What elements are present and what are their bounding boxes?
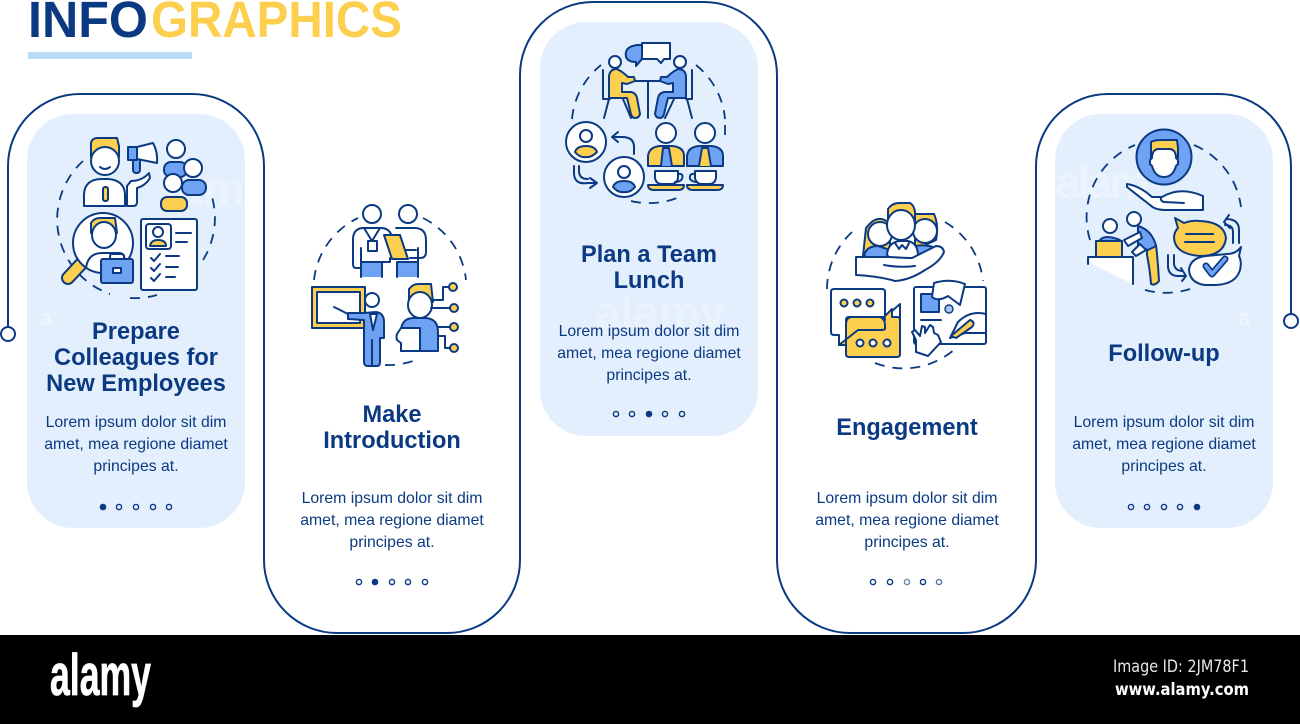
- text block: amet, mea regione diamet: [1072, 436, 1256, 453]
- heading: New Employees: [46, 371, 226, 397]
- text block: Lorem ipsum dolor sit dim: [559, 323, 739, 340]
- panel: prepare colleagues: [27, 114, 245, 528]
- heading: [581, 242, 717, 294]
- panel: team lunch: [540, 22, 758, 436]
- heading: Lunch: [614, 268, 684, 294]
- pagination dots: [100, 504, 172, 510]
- text block: principes at.: [606, 367, 692, 384]
- icon: colleagues and new employee: [57, 138, 215, 298]
- text block: principes at.: [349, 534, 435, 551]
- image id: Image ID: 2JM78F1: [1113, 657, 1249, 676]
- text block: Lorem ipsum dolor sit dim: [817, 490, 997, 507]
- text block: principes at.: [864, 534, 950, 551]
- pagination dots: [356, 579, 428, 585]
- icon: team lunch: [566, 43, 725, 203]
- heading: Introduction: [323, 428, 461, 454]
- text block: amet, mea regione diamet: [557, 345, 741, 362]
- text block: Lorem ipsum dolor sit dim: [302, 490, 482, 507]
- text block: principes at.: [93, 458, 179, 475]
- panel: follow-up: a: [1238, 305, 1251, 330]
- text block: principes at.: [1121, 458, 1207, 475]
- text block: [557, 323, 741, 384]
- site url: www.alamy.com: [1115, 680, 1249, 700]
- footer bar: [0, 635, 1300, 724]
- panel: prepare colleagues: lam: [165, 163, 244, 215]
- panel: prepare colleagues: a: [40, 305, 53, 330]
- text block: Lorem ipsum dolor sit dim: [1074, 414, 1254, 431]
- panel: engagement: [815, 203, 999, 585]
- text block: amet, mea regione diamet: [815, 512, 999, 529]
- icon: follow-up: [1087, 130, 1241, 293]
- heading: Colleagues for: [54, 345, 218, 371]
- title: [28, 0, 402, 59]
- text block: [300, 490, 484, 551]
- panel: follow-up: [1055, 114, 1273, 528]
- text block: [815, 490, 999, 551]
- text block: amet, mea regione diamet: [300, 512, 484, 529]
- icon: introductions: [311, 205, 466, 366]
- heading: [323, 402, 461, 454]
- text block: [1072, 414, 1256, 475]
- heading: Engagement: [836, 415, 978, 441]
- pagination dots: [870, 579, 942, 585]
- logo: alamy: [50, 643, 151, 708]
- icon: engagement: [827, 203, 986, 368]
- text block: [44, 414, 228, 475]
- heading: Plan a Team: [581, 242, 717, 268]
- pagination dots: [613, 411, 685, 417]
- text block: amet, mea regione diamet: [44, 436, 228, 453]
- text block: Lorem ipsum dolor sit dim: [46, 414, 226, 431]
- panel: team lunch: alamy: [595, 286, 726, 338]
- panel: follow-up: alam: [1055, 156, 1150, 208]
- pagination dots: [1128, 504, 1200, 510]
- heading: [46, 319, 226, 397]
- heading: Prepare: [92, 319, 180, 345]
- panel: make introduction: [300, 205, 484, 585]
- heading: Make: [362, 402, 422, 428]
- heading: Follow-up: [1108, 341, 1220, 367]
